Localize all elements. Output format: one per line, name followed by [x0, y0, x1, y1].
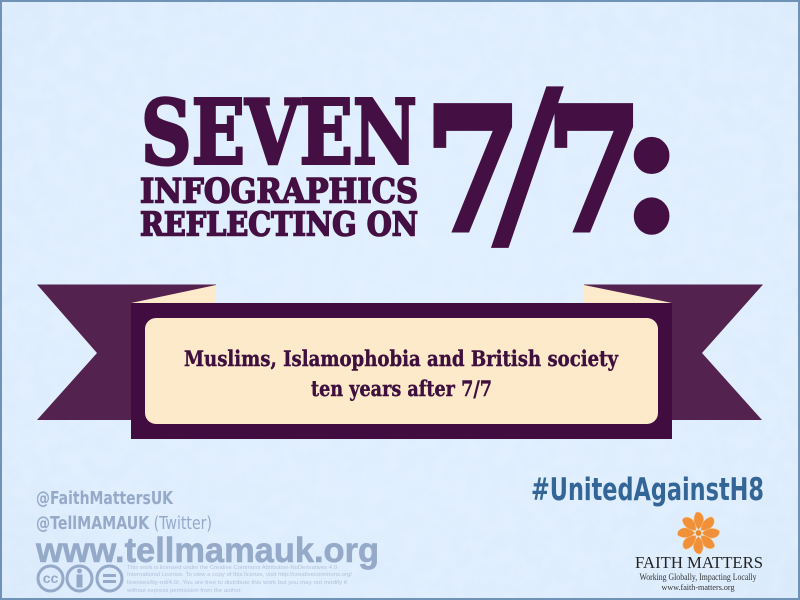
- faith matters logo text: Working Globally, Impacting Locally: [640, 573, 757, 583]
- title: seven infographics reflecting on: SEVEN: [141, 80, 417, 184]
- ribbon subtitle: ten years after 7/7: [311, 376, 492, 401]
- left ribbon tail: [37, 284, 216, 420]
- licence text: licenses/by-nd/4.0/. You are free to distribute this work but you may not modify it: [127, 580, 347, 586]
- right ribbon tail: [584, 284, 763, 420]
- icon: no derivatives: [97, 566, 122, 591]
- faith matters logo text: www.faith-matters.org: [662, 582, 735, 592]
- title: 7/7: 7: [424, 70, 522, 272]
- licence text: International License. To view a copy of this license, visit http://creativecommons.org/: [127, 572, 352, 578]
- icon: faith matters flower: [678, 512, 719, 554]
- faith matters logo text: [635, 553, 763, 592]
- title: seven infographics reflecting on: REFLECTING ON: [140, 204, 418, 244]
- title: seven infographics reflecting on: [140, 80, 418, 244]
- ribbon inner panel: [145, 318, 658, 424]
- creative commons icons: [38, 566, 122, 591]
- ribbon subtitle: Muslims, Islamophobia and British society: [184, 346, 619, 371]
- ribbon banner: [37, 284, 763, 439]
- faith matters logo text: FAITH MATTERS: [635, 553, 763, 572]
- icon: attribution: [67, 566, 92, 591]
- licence text: without express permission from the author.: [126, 588, 242, 594]
- licence text: This work is licensed under the Creative Commons Attribution-NoDerivatives 4.0: [127, 565, 337, 571]
- title: 7/7: /: [491, 31, 564, 297]
- title: 7/7: :: [618, 52, 685, 276]
- title: 7/7: [424, 31, 685, 297]
- website url: www.tellmamauk.org: [35, 531, 379, 570]
- licence text: [126, 565, 352, 594]
- ribbon main frame: [131, 303, 672, 439]
- social handles: [36, 488, 212, 534]
- title: 7/7: 7: [545, 70, 643, 272]
- social handles: @TellMAMAUK (Twitter): [36, 513, 212, 534]
- icon: cc: cc: [43, 570, 58, 586]
- ribbon subtitle: [184, 346, 619, 401]
- left ribbon fold: [131, 285, 216, 303]
- title: seven infographics reflecting on: INFOGRAPHICS: [140, 172, 418, 212]
- right ribbon fold: [584, 285, 672, 303]
- social handles: @FaithMattersUK: [36, 488, 174, 509]
